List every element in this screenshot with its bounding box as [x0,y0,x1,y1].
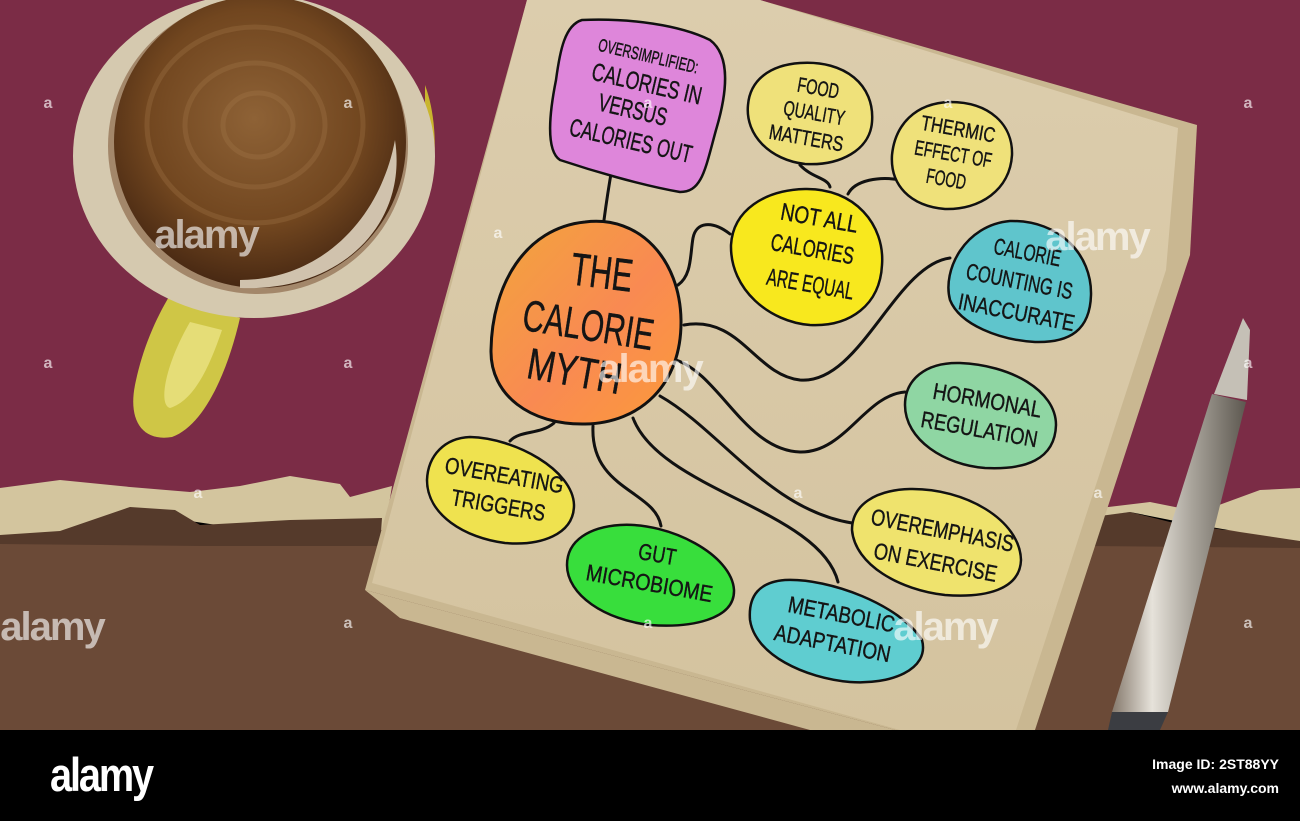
node: not all calories are equal: ARE EQUAL [765,264,856,306]
torn paper edge left [0,476,392,537]
node: not all calories are equal: NOT ALL [779,199,860,239]
node: the calorie myth: THE [568,243,636,302]
node: thermic effect of food: THERMIC [919,112,997,147]
watermarks: a [344,95,353,112]
node: calorie counting is inaccurate: COUNTING IS [964,258,1075,304]
pen [1108,318,1250,730]
node: overemphasis on exercise: ON EXERCISE [872,537,999,587]
node: oversimplified: OVERSIMPLIFIED: [596,35,700,77]
node: not all calories are equal: CALORIES [769,229,856,270]
node: gut microbiome: GUT [636,538,678,570]
watermarks: a [944,95,953,112]
watermarks: a [1244,615,1253,632]
node: overeating triggers: OVEREATING [443,452,566,498]
image id: Image ID: 2ST88YY [1152,756,1280,772]
node: calorie counting is inaccurate: INACCURATE [956,288,1077,336]
node: food quality matters [748,63,872,164]
node: thermic effect of food: FOOD [924,165,968,194]
torn paper edge right [1100,488,1300,541]
footer bar [0,730,1300,821]
node: gut microbiome [567,525,734,626]
node: oversimplified: VERSUS [596,89,670,132]
node: oversimplified: CALORIES OUT [567,114,695,169]
watermarks: alamy [0,605,106,649]
watermarks: alamy [154,213,260,257]
node: oversimplified [550,20,725,192]
node: calorie counting is inaccurate [948,221,1091,342]
background: brown paper [0,530,1300,730]
napkin [365,0,1197,730]
node: thermic effect of food [892,102,1012,209]
coffee mug [73,0,435,438]
watermarks: a [1094,485,1103,502]
site url: www.alamy.com [1171,780,1279,796]
watermarks: a [344,355,353,372]
watermarks: a [344,615,353,632]
node: metabolic adaptation: METABOLIC [786,591,897,637]
node: overemphasis on exercise: OVEREMPHASIS [869,504,1016,557]
node: food quality matters: MATTERS [767,121,845,156]
torn paper shadow left [0,507,382,546]
watermarks [0,95,1253,649]
node: hormonal regulation [905,363,1056,468]
node: overemphasis on exercise [852,489,1021,596]
node: not all calories are equal [731,189,882,325]
node: thermic effect of food: EFFECT OF [913,137,994,173]
footer logo: alamy [50,748,154,801]
coffee swirl [147,27,363,223]
node: metabolic adaptation: ADAPTATION [772,619,893,667]
watermarks: a [644,615,653,632]
watermarks: a [194,485,203,502]
node: the calorie myth [491,221,681,424]
torn paper shadow right [1090,512,1300,548]
watermarks: a [644,95,653,112]
watermarks: alamy [893,605,999,649]
node: calorie counting is inaccurate: CALORIE [992,233,1063,271]
node: hormonal regulation: HORMONAL [931,378,1044,423]
connector lines [510,165,950,582]
node: overeating triggers: TRIGGERS [449,484,547,526]
node: food quality matters: QUALITY [782,97,847,130]
node: hormonal regulation: REGULATION [919,406,1040,452]
node: the calorie myth: MYTH [523,339,626,404]
node: overeating triggers [427,437,574,543]
watermarks: a [44,355,53,372]
node: the calorie myth: CALORIE [519,291,657,360]
watermarks: alamy [598,347,704,391]
watermarks: a [1244,355,1253,372]
node: oversimplified: CALORIES IN [589,58,705,110]
watermarks: a [1244,95,1253,112]
watermarks: alamy [1045,215,1151,259]
node: food quality matters: FOOD [795,74,841,104]
watermarks: a [794,485,803,502]
watermarks: a [494,225,503,242]
node: gut microbiome: MICROBIOME [584,559,715,607]
background: maroon paper [0,0,1300,510]
watermarks: a [44,95,53,112]
node: metabolic adaptation [750,580,923,682]
